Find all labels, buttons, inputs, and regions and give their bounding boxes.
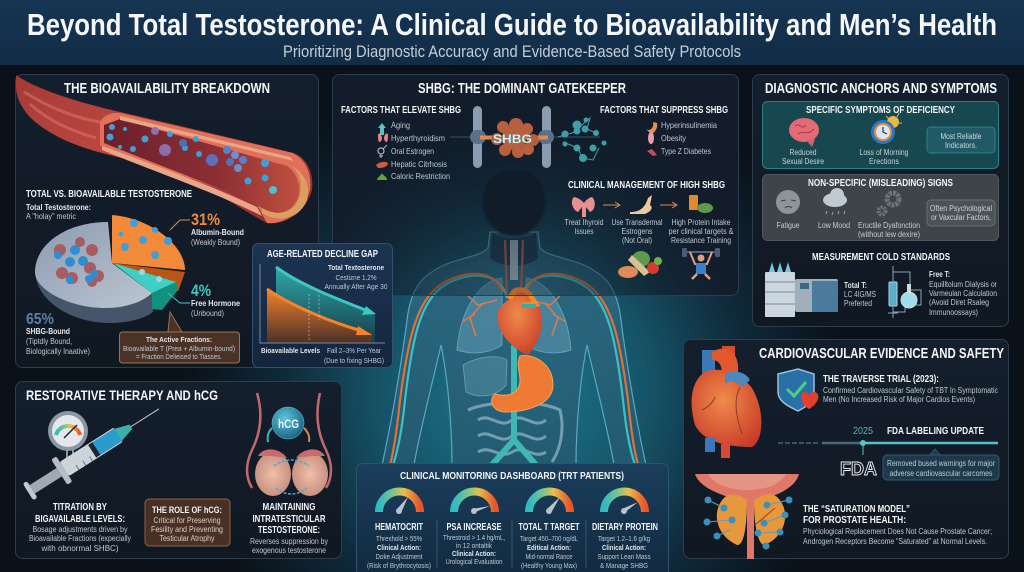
total T method: LC 4IG/MS — [844, 290, 876, 299]
gauge: total T target — [518, 491, 580, 570]
icon: syringe with gauge — [20, 396, 167, 505]
free T method: Equilltolum Dialysis or — [929, 280, 997, 289]
gauge: hematocrit — [367, 491, 431, 570]
suppress factors: FACTORS THAT SUPPRESS SHBG — [600, 105, 728, 116]
elevate factors: Hepatic Citrhosis — [391, 159, 447, 169]
subheading: TOTAL VS. BIOAVAILABLE TESTOSTERONE — [26, 189, 192, 200]
gauge: hematocrit: Doke Adjustment — [376, 552, 423, 561]
free T method: Immunoossays) — [929, 308, 978, 317]
65% label: 65% — [26, 311, 54, 328]
management labels: Estrogens — [622, 227, 652, 236]
gauge: dietary protein: & Manage SHBG — [600, 561, 648, 570]
titration text: Bioavailable Fractions (expecially — [29, 534, 131, 543]
heading: RESTORATIVE THERAPY AND hCG — [26, 387, 218, 403]
31% label — [170, 210, 244, 247]
intratesticular text: INTRATESTICULAR — [252, 514, 326, 525]
4% label: (Unbound) — [191, 309, 224, 318]
titration text: BIGAVAILABLE LEVELS: — [35, 514, 125, 525]
suppress factors — [600, 105, 728, 156]
gauge: PSA increase: Clinical Action: — [452, 549, 496, 558]
central vessel — [492, 345, 536, 465]
callout: active fractions: Bioavailable T (Prea + Albumin-bound) — [123, 344, 235, 353]
icon: food — [618, 251, 662, 278]
elevate factors: Caloric Restriction — [391, 171, 450, 181]
gauge: PSA increase: PSA INCREASE — [446, 521, 502, 533]
FDA timeline — [778, 425, 998, 455]
note: psychological factors — [927, 200, 995, 226]
heading: clinical management: CLINICAL MANAGEMENT OF HIGH SHBG — [568, 180, 725, 191]
65% label — [26, 311, 90, 356]
liver — [463, 357, 507, 396]
total testosterone note: Total Testosterone: — [26, 203, 91, 212]
gauge: total T target: Editical Action: — [527, 543, 571, 552]
management labels: Use Transdermal — [612, 218, 663, 227]
total testosterone note — [324, 263, 388, 291]
callout: role of hCG: Testicular Atrophy — [160, 534, 214, 543]
gauge: total T target: (Healthy Young Max) — [521, 561, 577, 570]
note: psychological factors: Often Psychological — [930, 204, 992, 213]
total testosterone note: A "holay" metric — [26, 212, 76, 221]
tooltip: labeling update: Removed bused warnings for major — [887, 459, 995, 468]
elevate factors: Oral Estrogen — [391, 146, 434, 156]
total T method: Preferted — [844, 299, 872, 308]
4% label: Free Hormone — [191, 298, 240, 308]
traverse trial text: THE TRAVERSE TRIAL (2023): — [823, 373, 939, 385]
bioavailable levels note: (Due to fixing SHBG) — [324, 356, 384, 365]
management labels: Issues — [574, 227, 594, 236]
icon: hCG and testes: hCG — [278, 417, 299, 431]
suppress factors: Obesity — [661, 133, 687, 143]
blood cells — [106, 124, 277, 194]
titration text: TITRATION BY — [53, 502, 107, 513]
intratesticular text: exogenous testosterone — [252, 546, 326, 555]
elevate factors: Hyperthyroidism — [391, 133, 445, 143]
gauge: dietary protein: Support Lean Mass — [598, 552, 651, 561]
icon: brain — [789, 118, 819, 147]
icon: hand with estrogen — [630, 195, 652, 214]
gauge: dietary protein: Clinical Action: — [602, 543, 646, 552]
gauge: PSA increase — [443, 491, 505, 566]
lungs — [457, 278, 571, 353]
icon: clock — [871, 113, 902, 144]
box: non-specific signs: Low Mood — [818, 221, 850, 230]
suppress factors: Type Z Diabetes — [661, 146, 711, 156]
65% label: (Tiptdly Bound, — [26, 337, 72, 346]
header band — [0, 0, 1024, 65]
box: non-specific signs: NON-SPECIFIC (MISLEADING) SIGNS — [808, 178, 953, 189]
icon: prostate — [695, 474, 799, 559]
total T method: Total T: — [844, 281, 867, 290]
heading: THE BIOAVAILABILITY BREAKDOWN — [64, 80, 270, 97]
intratesticular text — [250, 502, 328, 555]
bioavailable levels note: Bioavailable Levels — [261, 346, 320, 355]
bioavailable levels note — [261, 346, 384, 365]
elevate factors: Aging — [391, 120, 410, 130]
free T method — [929, 270, 997, 317]
panel: bioavailability breakdown — [16, 74, 318, 368]
box: specific symptoms: Sexual Desire — [782, 157, 824, 166]
heading: SHBG: THE DOMINANT GATEKEEPER — [418, 80, 626, 97]
note: most reliable: Most Reliable — [940, 132, 982, 141]
box: non-specific signs: (without lew dexire) — [858, 230, 920, 239]
gauge: hematocrit: Threxhold > 55% — [376, 534, 422, 543]
4% label — [168, 281, 240, 318]
management labels: High Protein Intake — [672, 218, 731, 227]
management labels: Treat Ihyroid — [564, 218, 604, 227]
management labels: (Not Oral) — [622, 236, 652, 245]
icon: shield and heart — [778, 369, 818, 411]
subtitle: Prioritizing Diagnostic Accuracy and Evidence-Based Safety Protocols — [283, 43, 741, 61]
callout: role of hCG — [145, 499, 230, 546]
tooltip: labeling update — [883, 449, 999, 480]
management labels: per clinical targets & — [668, 227, 734, 236]
box: specific symptoms — [762, 102, 998, 168]
note: most reliable — [927, 127, 995, 153]
elevate factors: FACTORS THAT ELEVATE SHBG — [341, 105, 461, 116]
icon: thyroid — [572, 197, 595, 217]
bronchi — [462, 296, 566, 336]
box: non-specific signs: Eructile Dyafonction — [858, 221, 920, 230]
SHBG gate icon: SHBG — [493, 132, 532, 146]
saturation model text: FOR PROSTATE HEALTH: — [803, 514, 906, 526]
gauge: total T target: Mid-normal Rance — [526, 552, 572, 561]
decline chart — [260, 264, 385, 343]
box: non-specific signs: Fatigue — [776, 221, 800, 230]
callout: active fractions — [120, 312, 240, 363]
31% label: Albumin-Bound — [191, 227, 244, 237]
traverse trial text: Men (No Increased Risk of Major Cardios Events) — [823, 395, 975, 404]
gauge: hematocrit: (Risk of Brythrocytosis) — [367, 561, 431, 570]
gauge: dietary protein: Target 1.2–1.6 g/kg — [598, 534, 650, 543]
icon: LC-MS machine — [765, 262, 838, 317]
stomach — [492, 356, 553, 412]
saturation model text: THE “SATURATION MODEL” — [803, 503, 910, 515]
free T method: Varmeulan Calculation — [929, 289, 997, 298]
box: specific symptoms: Loss of Morning — [860, 148, 908, 157]
gauge: PSA increase: Urological Evaluation — [446, 557, 502, 566]
FDA timeline: 2025 — [853, 425, 873, 437]
artery illustration — [16, 75, 312, 223]
heading: AGE-RELATED DECLINE GAP — [267, 249, 378, 260]
total testosterone note: Total Textosterone — [328, 263, 384, 272]
gauge: PSA increase: Threstroid > 1.4 hg/mL, — [443, 533, 505, 542]
saturation model text — [803, 503, 992, 546]
heading: measurement standards: MEASUREMENT COLD STANDARDS — [812, 252, 950, 263]
titration text — [29, 502, 131, 553]
31% label: 31% — [191, 210, 220, 229]
bioavailable levels note: Fall 2–3% Per Year — [327, 346, 381, 355]
callout: role of hCG: THE ROLE OF hCG: — [152, 505, 222, 516]
icon: anatomical heart — [692, 346, 761, 458]
heart — [497, 287, 542, 355]
heading: CLINICAL MONITORING DASHBOARD (TRT PATIENTS) — [400, 470, 624, 482]
box: specific symptoms: Reduced — [790, 148, 816, 157]
panel: diagnostic anchors — [752, 74, 1008, 326]
total testosterone note — [26, 203, 91, 221]
head — [482, 168, 546, 236]
free T method: (Avoid Diret Rsaleg — [929, 298, 989, 307]
note: psychological factors: or Vaxcular Factors, — [931, 213, 991, 222]
icon: hCG and testes — [247, 393, 331, 496]
total T method — [844, 281, 876, 308]
neck shading — [490, 232, 538, 266]
icon: tired face — [776, 190, 800, 214]
gauge: total T target: TOTAL T TARGET — [518, 521, 580, 533]
panel: monitoring dashboard — [356, 464, 668, 572]
gauge: hematocrit: Clinical Action: — [377, 543, 421, 552]
4% label: 4% — [191, 281, 211, 300]
panel: SHBG gatekeeper — [332, 74, 738, 296]
callout: role of hCG: Fesility and Preventing — [151, 525, 223, 534]
SHBG gate icon — [450, 106, 600, 168]
molecules — [558, 118, 606, 162]
gauge: total T target: Target 450–700 ng/dL — [520, 534, 578, 543]
icon: supplement and greens — [689, 195, 713, 213]
traverse trial text — [823, 373, 998, 404]
titration text: Bosage adjustments driven by — [32, 525, 128, 534]
callout: active fractions: The Active Fractions: — [146, 335, 212, 344]
traverse trial text: Confirmed Cardiovascular Safety of TBT In Symptomatic — [823, 386, 998, 395]
FDA timeline: FDA LABELING UPDATE — [887, 425, 984, 437]
management labels — [564, 218, 734, 245]
suppress factors: Hyperinsulinemia — [661, 120, 717, 130]
total testosterone note: Annually After Age 30 — [324, 282, 388, 291]
box: specific symptoms: Erections — [869, 157, 899, 166]
intratesticular text: Reverses suppression by — [250, 537, 328, 546]
human body figure — [382, 168, 646, 465]
panel: age-related decline — [252, 244, 392, 368]
callout: active fractions: = Fraction Delieised to Tiasses. — [136, 352, 222, 361]
FDA logo: FDA — [840, 459, 877, 479]
callout: role of hCG: Critical for Preserving — [154, 516, 220, 525]
icon: weightlifter — [682, 248, 720, 279]
box: specific symptoms: SPECIFIC SYMPTOMS OF DEFICIENCY — [806, 105, 955, 116]
31% label: (Weakly Bound) — [191, 238, 240, 247]
saturation model text: Phyciological Replacement Does Not Cause Prostate Cancer; — [803, 527, 992, 536]
icon: gears — [878, 193, 899, 214]
blood vessels — [390, 240, 638, 465]
body silhouette — [382, 232, 646, 465]
intratesticular text: MAINTAINING — [262, 502, 316, 513]
65% label: SHBG-Bound — [26, 326, 70, 336]
saturation model text: Androgen Receptors Become “Saturated” at Normal Levels. — [803, 537, 987, 546]
management labels: Resistance Training — [671, 236, 731, 245]
elevate factors — [341, 105, 461, 181]
intratesticular text: TESTOSTERONE: — [258, 525, 320, 536]
65% label: Biologically Inaative) — [26, 347, 90, 356]
titration text: with obnormal SHBC) — [40, 544, 119, 553]
panel: cardiovascular evidence — [684, 340, 1008, 559]
gauge: dietary protein: DIETARY PROTEIN — [592, 521, 658, 533]
free T method: Free T: — [929, 270, 950, 279]
icon: rain cloud — [823, 188, 847, 215]
box: non-specific signs — [762, 174, 998, 240]
tooltip: labeling update: adverse cardiovascular carcomes — [890, 469, 992, 478]
pie chart — [35, 215, 185, 323]
panel: restorative therapy — [16, 382, 342, 558]
arrow — [660, 202, 677, 208]
gauge: dietary protein — [592, 491, 658, 570]
total testosterone note: Cestizne 1.2% — [336, 273, 377, 282]
gauge: PSA increase: in 12 ontaltik — [456, 541, 492, 550]
note: most reliable: Indicators. — [945, 141, 977, 150]
gauge: hematocrit: HEMATOCRIT — [375, 521, 423, 533]
intestines — [468, 402, 562, 462]
arrow — [603, 202, 620, 208]
icon: dialysis apparatus — [888, 266, 921, 318]
